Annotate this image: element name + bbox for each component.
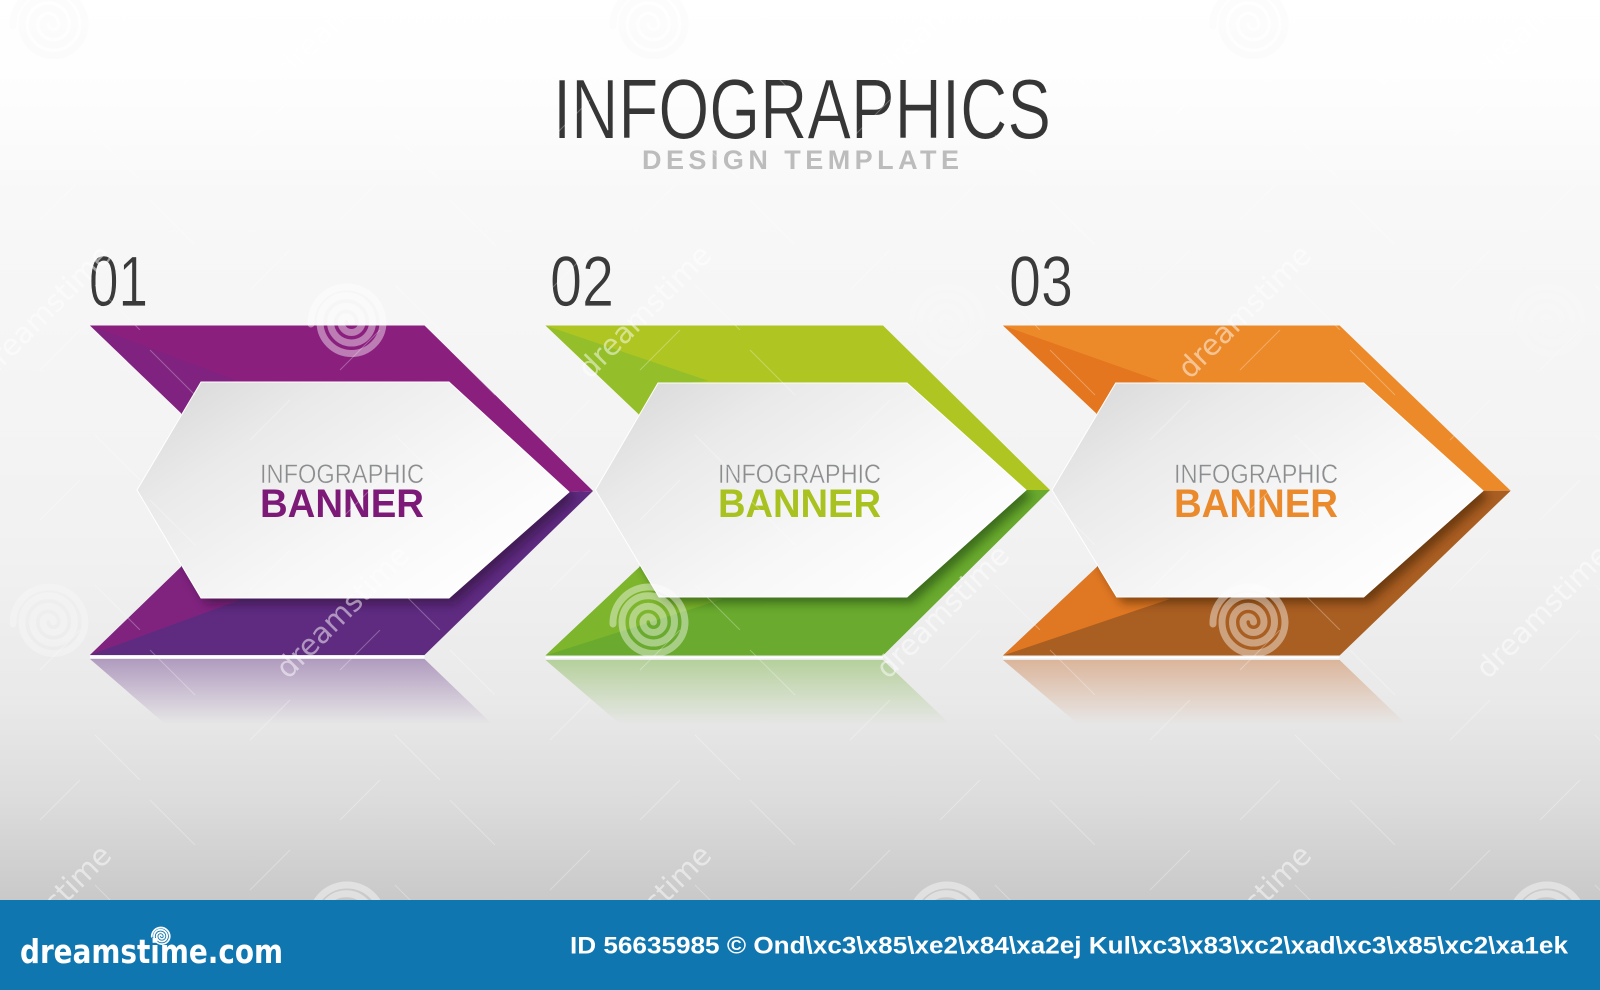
stock watermark overlay: dreamstime bbox=[269, 538, 416, 685]
panel: step 02 green bbox=[546, 243, 1050, 724]
reflection bbox=[546, 656, 950, 724]
banner text: INFOGRAPHIC bbox=[1174, 459, 1338, 489]
banner text: BANNER bbox=[260, 482, 424, 526]
reflection bbox=[90, 656, 492, 724]
banner text bbox=[260, 459, 424, 526]
number 03: 03 bbox=[1009, 243, 1073, 322]
panel: step 01 purple bbox=[89, 243, 593, 724]
footer logo: dreamstime.com bbox=[20, 932, 283, 971]
footer credit: ID 56635985 © Ond\xc3\x85\xe2\x84\xa2ej Kul\xc3\x83\xc2\xad\xc3\x85\xc2\xa1ek bbox=[570, 932, 1569, 960]
banner text bbox=[718, 459, 881, 526]
stock watermark overlay: dreamstime bbox=[1171, 238, 1318, 385]
stock watermark overlay: dreamstime bbox=[1171, 838, 1318, 985]
white hexagon bbox=[137, 382, 569, 598]
banner text: BANNER bbox=[718, 482, 881, 526]
banner text: BANNER bbox=[1174, 482, 1338, 526]
banner text: INFOGRAPHIC bbox=[260, 459, 424, 489]
white hexagon bbox=[595, 383, 1026, 597]
arrow band bbox=[90, 326, 593, 655]
subtitle: DESIGN TEMPLATE bbox=[642, 145, 959, 175]
arrow band bbox=[1003, 326, 1511, 656]
number 01: 01 bbox=[89, 243, 148, 322]
arrow band bbox=[546, 326, 1050, 656]
number 02: 02 bbox=[550, 243, 614, 322]
panel: step 03 orange bbox=[1003, 243, 1511, 724]
stock watermark overlay: dreamstime bbox=[869, 538, 1016, 685]
banner text bbox=[1174, 459, 1338, 526]
title: INFOGRAPHICS bbox=[553, 62, 1051, 158]
footer bar bbox=[0, 900, 1600, 990]
stock watermark overlay: dreamstime bbox=[571, 238, 718, 385]
white hexagon bbox=[1052, 383, 1483, 597]
stock watermark overlay: dreamstime bbox=[571, 838, 718, 985]
banner text: INFOGRAPHIC bbox=[718, 459, 881, 489]
reflection bbox=[1003, 656, 1406, 724]
